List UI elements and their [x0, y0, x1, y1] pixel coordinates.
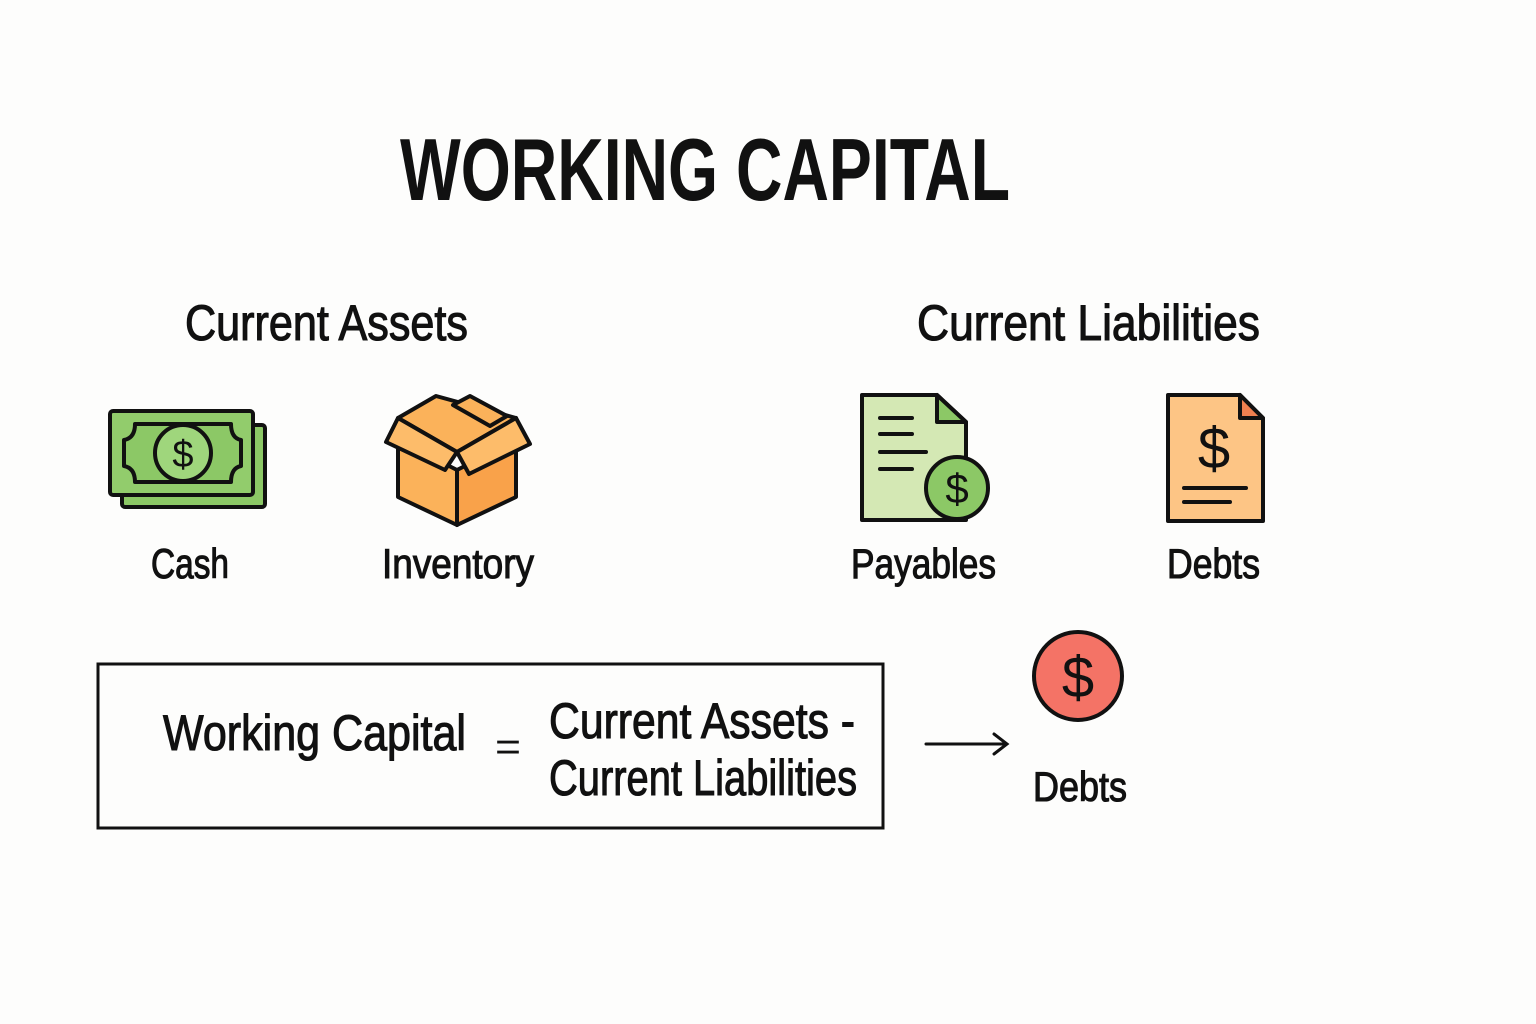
heading: current liabilities: Current Liabilities: [917, 295, 1260, 351]
icon: cash: [110, 411, 265, 507]
icon: inventory box: [386, 396, 530, 525]
icon: payables: [862, 395, 988, 520]
icon: red coin: [1034, 632, 1122, 720]
label: debts: Debts: [1167, 540, 1260, 587]
heading: current assets: Current Assets: [185, 295, 468, 351]
icon: debts document: [1168, 395, 1263, 521]
formula box: [98, 664, 883, 828]
icon: payables: $: [945, 465, 969, 512]
arrow: [926, 734, 1007, 754]
equals: =: [495, 725, 521, 769]
icon: red coin: $: [1062, 645, 1094, 710]
label: inventory: Inventory: [382, 540, 534, 587]
formula right: Current Assets -: [549, 693, 855, 749]
formula box: Current Liabilities: [549, 750, 857, 806]
title: WORKING CAPITAL: [400, 120, 1010, 219]
icon: debts document: $: [1198, 416, 1230, 481]
label: payables: Payables: [851, 540, 996, 587]
label: debts bottom: Debts: [1033, 763, 1127, 810]
formula left: Working Capital: [163, 705, 466, 761]
label: cash: Cash: [151, 540, 229, 587]
icon: cash: $: [172, 434, 194, 476]
